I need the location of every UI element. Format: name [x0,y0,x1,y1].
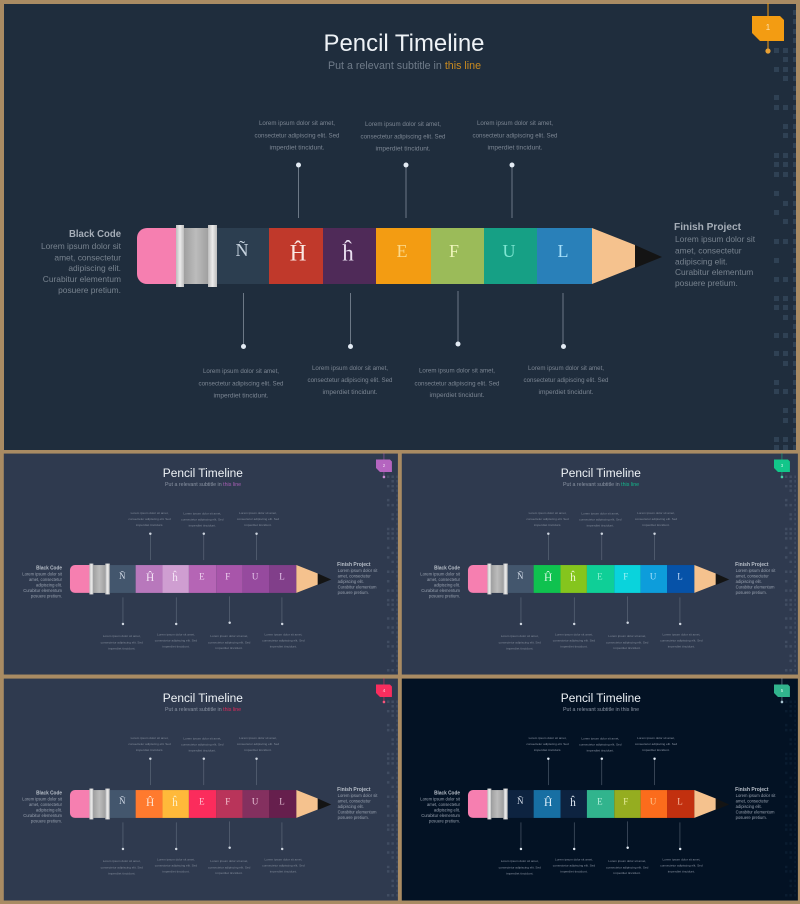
callouts above: consectetur adipiscing elit. Sed [237,742,279,746]
pencil: F [225,571,230,581]
callouts below: consectetur adipiscing elit. Sed [606,640,649,644]
right label: Finish Project: adipiscing elit. [338,579,364,584]
right label: Finish Project: amet, consectetur [736,799,769,804]
callouts above: Lorem ipsum dolor sit amet, [365,121,441,128]
right label: Finish Project [735,787,776,820]
callouts below: consectetur adipiscing elit. Sed [660,639,703,643]
callouts above [526,736,677,785]
title: Pencil Timeline [561,691,641,705]
left label: Black Code: Lorem ipsum dolor sit [22,797,63,802]
right label: Finish Project: Lorem ipsum dolor sit [736,568,776,573]
left label: Black Code: adipiscing elit. [68,263,121,273]
left label: Black Code: amet, consectetur [427,802,461,807]
callouts below: imperdiet tincidunt. [538,389,594,396]
callouts above: consectetur adipiscing elit. Sed [181,743,224,747]
callouts above: imperdiet tincidunt. [189,523,216,527]
callouts below: imperdiet tincidunt. [614,646,641,650]
callouts above: Lorem ipsum dolor sit amet, [239,511,277,515]
left label: Black Code: Lorem ipsum dolor sit [41,241,122,251]
left label: Black Code [420,566,461,598]
panel: dark variant slide [402,678,798,901]
left label: Black Code: posuere pretium. [429,818,460,823]
callouts below: consectetur adipiscing elit. Sed [524,377,609,384]
left label: Black Code: amet, consectetur [54,252,121,262]
page badge [774,453,790,478]
right label: Finish Project: Curabitur elementum [338,809,377,814]
left label: Black Code [420,791,461,823]
pencil: Ñ [517,571,524,581]
subtitle: Put a relevant subtitle in this line [165,707,241,713]
callouts below: imperdiet tincidunt. [108,871,136,875]
pencil: U [650,571,657,581]
left label: Black Code: Lorem ipsum dolor sit [420,572,461,577]
callouts above: imperdiet tincidunt. [587,523,614,527]
callouts above: imperdiet tincidunt. [270,144,325,152]
pencil [70,789,331,819]
callouts below: consectetur adipiscing elit. Sed [499,640,541,644]
pencil: Ĥ [290,240,306,266]
pencil: Ñ [119,796,126,806]
callouts below: consectetur adipiscing elit. Sed [155,639,197,643]
left label: Black Code: Black Code [36,791,62,797]
callouts above: Lorem ipsum dolor sit amet, [131,736,169,740]
right label: Finish Project: Lorem ipsum dolor sit [675,234,756,244]
callouts below: Lorem ipsum dolor sit amet, [663,633,700,637]
callouts above: imperdiet tincidunt. [534,748,561,752]
pencil: ĥ [342,240,354,266]
callouts below: imperdiet tincidunt. [216,871,243,875]
pencil: E [199,796,205,806]
left label: Black Code: adipiscing elit. [36,807,62,812]
left label: Black Code: Black Code [434,566,460,572]
left label: Black Code: posuere pretium. [31,593,62,598]
callouts above: consectetur adipiscing elit. Sed [237,517,279,521]
callouts above: consectetur adipiscing elit. Sed [181,518,224,522]
callouts above: consectetur adipiscing elit. Sed [579,518,622,522]
subtitle: Put a relevant subtitle in this line [328,60,481,72]
callouts above: Lorem ipsum dolor sit amet, [581,736,619,740]
pencil: Ñ [236,239,248,260]
right label: Finish Project: posuere pretium. [736,590,767,595]
pencil: U [502,241,516,261]
callouts below: Lorem ipsum dolor sit amet, [528,365,604,372]
pencil: U [650,796,657,806]
right label: Finish Project: Finish Project [735,562,769,568]
page badge [376,678,392,703]
callouts below: imperdiet tincidunt. [270,645,297,649]
callouts above: consectetur adipiscing elit. Sed [128,742,171,746]
callouts below: Lorem ipsum dolor sit amet, [419,368,495,374]
subtitle: Put a relevant subtitle in this line [563,482,639,488]
right label: Finish Project: Finish Project [337,562,371,568]
right label: Finish Project: amet, consectetur [338,799,371,804]
pencil: ĥ [570,570,576,584]
left label: Black Code: Lorem ipsum dolor sit [420,797,461,802]
pencil: L [558,241,568,261]
right label: Finish Project: posuere pretium. [338,815,369,820]
callouts above: consectetur adipiscing elit. Sed [579,743,622,747]
callouts below: Lorem ipsum dolor sit amet, [555,633,593,637]
left label: Black Code: adipiscing elit. [434,807,460,812]
callouts above: imperdiet tincidunt. [189,748,216,752]
panel: red variant slide [4,678,398,901]
right label: Finish Project: Finish Project [674,221,741,233]
panel: green variant slide [402,453,798,675]
right label: Finish Project: posuere pretium. [675,278,738,288]
callouts below: imperdiet tincidunt. [668,870,695,874]
callouts below: imperdiet tincidunt. [270,870,297,874]
callouts above: Lorem ipsum dolor sit amet, [183,736,221,740]
right label: Finish Project: amet, consectetur [736,574,769,579]
callouts above: consectetur adipiscing elit. Sed [526,742,569,746]
callouts below: Lorem ipsum dolor sit amet, [103,859,141,863]
callouts below: Lorem ipsum dolor sit amet, [210,859,248,863]
left label: Black Code: Black Code [434,791,460,797]
callouts below: imperdiet tincidunt. [162,870,190,874]
right label: Finish Project: Curabitur elementum [675,267,753,277]
callouts below: imperdiet tincidunt. [214,392,269,400]
page badge: 5 [781,688,784,693]
callouts below: imperdiet tincidunt. [108,646,136,650]
right label: Finish Project: adipiscing elit. [736,579,762,584]
left label: Black Code: Curabitur elementum [23,813,63,818]
right label: Finish Project: posuere pretium. [736,815,767,820]
callouts above: imperdiet tincidunt. [136,523,163,527]
callouts above: imperdiet tincidunt. [488,144,543,152]
pencil: U [252,571,259,581]
callouts above: imperdiet tincidunt. [244,523,272,527]
callouts below: imperdiet tincidunt. [668,645,695,649]
title: Pencil Timeline [561,466,641,480]
left label: Black Code: Curabitur elementum [43,274,121,284]
callouts below [101,821,305,875]
pencil: ĥ [172,570,178,584]
callouts below: imperdiet tincidunt. [506,646,534,650]
pencil: Ĥ [544,570,552,584]
left label: Black Code [41,228,122,295]
callouts below: consectetur adipiscing elit. Sed [414,380,500,388]
pencil: E [597,571,603,581]
pencil: L [677,571,683,581]
right label: Finish Project: adipiscing elit. [736,804,762,809]
callouts below: imperdiet tincidunt. [322,389,378,396]
callouts above: Lorem ipsum dolor sit amet, [637,511,675,515]
callouts above: imperdiet tincidunt. [642,748,670,752]
pencil: F [623,796,628,806]
callouts below: Lorem ipsum dolor sit amet, [203,368,279,375]
callouts below: consectetur adipiscing elit. Sed [499,865,541,869]
callouts below: Lorem ipsum dolor sit amet, [555,858,593,862]
callouts below: imperdiet tincidunt. [216,646,243,650]
callouts above: consectetur adipiscing elit. Sed [526,517,569,521]
callouts above: imperdiet tincidunt. [136,748,163,752]
callouts below: consectetur adipiscing elit. Sed [101,640,143,644]
callouts below: consectetur adipiscing elit. Sed [208,640,251,644]
page badge: 2 [383,463,386,468]
pencil: L [677,796,683,806]
pencil: Ĥ [146,570,154,584]
pencil: Ĥ [544,795,552,809]
right label: Finish Project [337,787,378,820]
callouts above: Lorem ipsum dolor sit amet, [259,120,335,127]
callouts above [526,511,677,560]
pencil: E [597,796,603,806]
pencil: ĥ [570,795,576,809]
right label: Finish Project: amet, consectetur [675,246,742,256]
pencil: F [623,571,628,581]
left label: Black Code [22,566,63,598]
left label: Black Code: amet, consectetur [427,577,461,582]
callouts below: Lorem ipsum dolor sit amet, [663,858,700,862]
right label: Finish Project: Curabitur elementum [736,809,775,814]
callouts above: imperdiet tincidunt. [376,146,431,152]
callouts above: imperdiet tincidunt. [534,523,561,527]
callouts above: Lorem ipsum dolor sit amet, [131,511,169,515]
pencil: U [252,796,259,806]
callouts below: consectetur adipiscing elit. Sed [606,865,649,869]
right label: Finish Project [674,221,756,288]
callouts below: consectetur adipiscing elit. Sed [101,865,143,869]
callouts below: Lorem ipsum dolor sit amet, [210,634,248,638]
left label: Black Code: Curabitur elementum [23,588,63,593]
callouts below: Lorem ipsum dolor sit amet, [103,634,141,638]
right label: Finish Project: adipiscing elit. [338,804,364,809]
callouts below: consectetur adipiscing elit. Sed [262,639,305,643]
left label: Black Code: posuere pretium. [58,285,121,295]
left label: Black Code: amet, consectetur [29,802,63,807]
callouts above [254,120,558,218]
callouts above [128,736,279,785]
callouts above: consectetur adipiscing elit. Sed [635,742,677,746]
callouts below: Lorem ipsum dolor sit amet, [608,859,646,863]
callouts below: consectetur adipiscing elit. Sed [660,864,703,868]
callouts below [198,291,609,400]
title: Pencil Timeline [163,466,243,480]
right label: Finish Project: posuere pretium. [338,590,369,595]
callouts above [128,511,279,560]
callouts above: consectetur adipiscing elit. Sed [360,134,446,140]
right label: Finish Project: Lorem ipsum dolor sit [736,793,776,798]
pencil [70,564,331,594]
pencil: F [449,241,459,261]
right label: Finish Project [735,562,776,595]
callouts below: Lorem ipsum dolor sit amet, [501,859,539,863]
left label: Black Code [22,791,63,823]
callouts above: Lorem ipsum dolor sit amet, [637,736,675,740]
callouts below: Lorem ipsum dolor sit amet, [608,634,646,638]
right label: Finish Project: amet, consectetur [338,574,371,579]
callouts above: Lorem ipsum dolor sit amet, [183,511,221,515]
right label: Finish Project [337,562,378,595]
right label: Finish Project: Lorem ipsum dolor sit [338,568,378,573]
callouts above: consectetur adipiscing elit. Sed [128,517,171,521]
left label: Black Code: posuere pretium. [429,593,460,598]
right label: Finish Project: Lorem ipsum dolor sit [338,793,378,798]
left label: Black Code: adipiscing elit. [36,582,62,587]
callouts above: Lorem ipsum dolor sit amet, [529,511,567,515]
pencil [137,225,662,287]
left label: Black Code: Black Code [36,566,62,572]
callouts below [499,821,703,875]
callouts below: consectetur adipiscing elit. Sed [208,865,251,869]
panel: main slide [4,3,796,450]
left label: Black Code: Black Code [69,228,121,240]
pencil: L [279,796,285,806]
callouts above: Lorem ipsum dolor sit amet, [581,511,619,515]
page badge [752,3,784,54]
callouts above: consectetur adipiscing elit. Sed [635,517,677,521]
callouts above: consectetur adipiscing elit. Sed [472,132,558,140]
left label: Black Code: Curabitur elementum [421,813,461,818]
left label: Black Code: amet, consectetur [29,577,63,582]
pencil: Ñ [517,796,524,806]
callouts below: consectetur adipiscing elit. Sed [155,864,197,868]
pencil: E [396,241,408,261]
right label: Finish Project: Finish Project [735,787,769,793]
left label: Black Code: adipiscing elit. [434,582,460,587]
left label: Black Code: Curabitur elementum [421,588,461,593]
right label: Finish Project: Curabitur elementum [338,584,377,589]
callouts below: consectetur adipiscing elit. Sed [308,377,393,384]
right label: Finish Project: Curabitur elementum [736,584,775,589]
title: Pencil Timeline [163,691,243,705]
subtitle: Put a relevant subtitle in this line [165,482,241,488]
callouts below: consectetur adipiscing elit. Sed [262,864,305,868]
callouts above: imperdiet tincidunt. [587,748,614,752]
left label: Black Code: posuere pretium. [31,818,62,823]
callouts below: Lorem ipsum dolor sit amet, [265,633,302,637]
pencil: Ĥ [146,795,154,809]
right label: Finish Project: Finish Project [337,787,371,793]
page badge: 3 [781,463,784,468]
pencil: Ñ [119,571,126,581]
callouts below: imperdiet tincidunt. [430,392,485,399]
callouts below: Lorem ipsum dolor sit amet, [501,634,539,638]
callouts below: Lorem ipsum dolor sit amet, [157,633,195,637]
callouts below: consectetur adipiscing elit. Sed [553,864,595,868]
callouts below: imperdiet tincidunt. [506,871,534,875]
right label: Finish Project: adipiscing elit. [675,256,728,266]
callouts above: Lorem ipsum dolor sit amet, [477,120,553,127]
pencil: F [225,796,230,806]
callouts below: Lorem ipsum dolor sit amet, [157,858,195,862]
callouts below: consectetur adipiscing elit. Sed [198,380,284,388]
callouts below: Lorem ipsum dolor sit amet, [265,858,302,862]
callouts below: imperdiet tincidunt. [614,871,641,875]
callouts below [101,596,305,650]
callouts below: imperdiet tincidunt. [560,870,588,874]
pencil [468,789,729,819]
pencil [468,564,729,594]
pencil: ĥ [172,795,178,809]
callouts below: imperdiet tincidunt. [162,645,190,649]
pencil: L [279,571,285,581]
callouts below: consectetur adipiscing elit. Sed [553,639,595,643]
pencil: E [199,571,205,581]
callouts above: imperdiet tincidunt. [244,748,272,752]
panel: purple variant slide [4,453,398,675]
page badge: 1 [766,23,771,32]
page badge [774,678,790,703]
callouts above: consectetur adipiscing elit. Sed [254,132,340,140]
callouts below: Lorem ipsum dolor sit amet, [312,365,388,372]
callouts above: Lorem ipsum dolor sit amet, [239,736,277,740]
callouts below: imperdiet tincidunt. [560,645,588,649]
callouts below [499,596,703,650]
subtitle: Put a relevant subtitle in this line [563,707,639,713]
page badge: 4 [383,688,386,693]
title: Pencil Timeline [324,30,484,57]
left label: Black Code: Lorem ipsum dolor sit [22,572,63,577]
page badge [376,453,392,478]
callouts above: imperdiet tincidunt. [642,523,670,527]
callouts above: Lorem ipsum dolor sit amet, [529,736,567,740]
